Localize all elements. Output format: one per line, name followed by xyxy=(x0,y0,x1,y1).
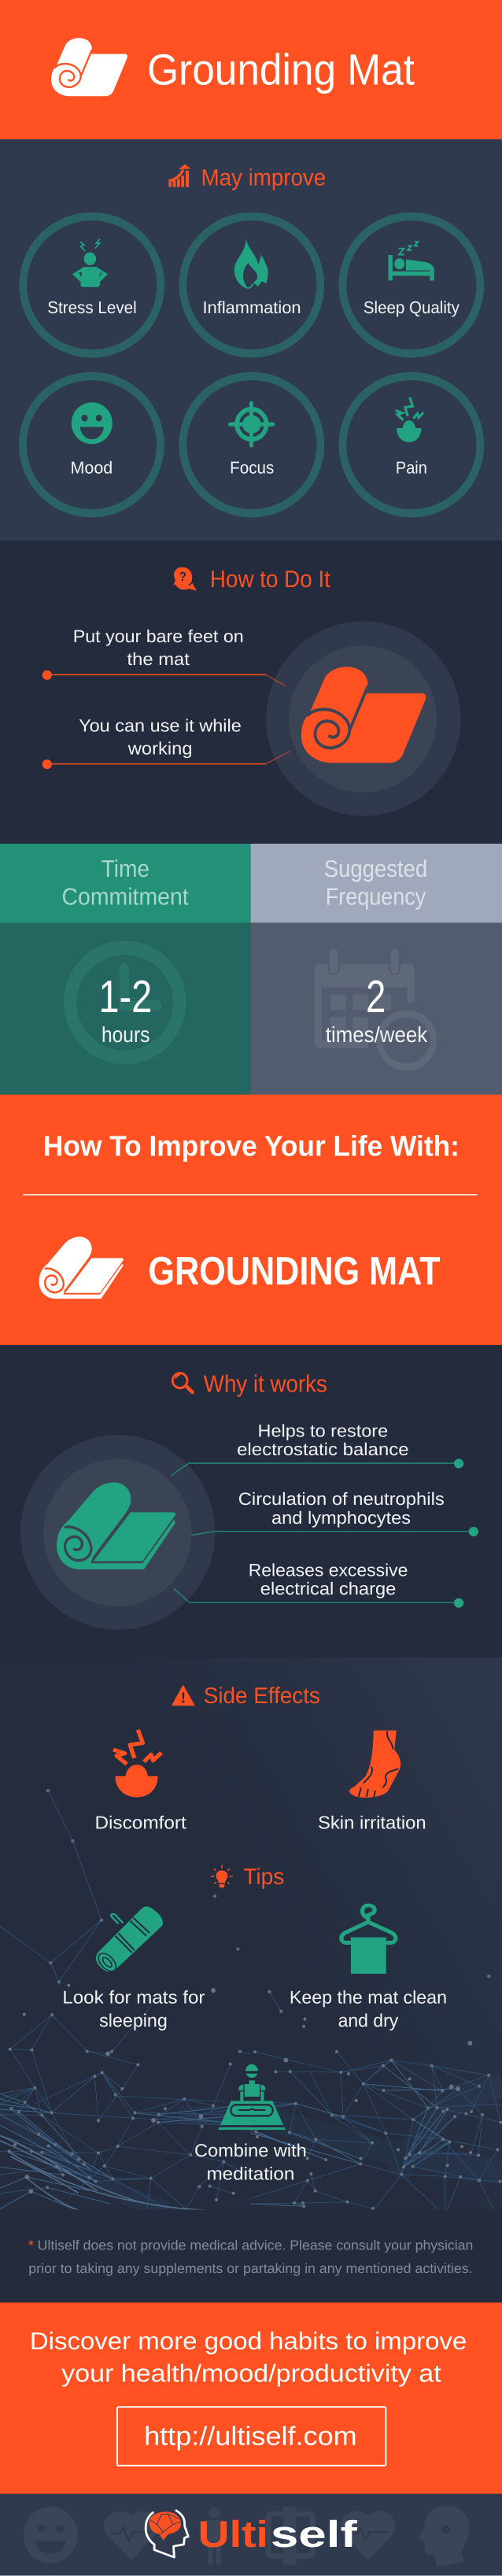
text: discover more: Discover more good habits to improve xyxy=(30,2327,467,2355)
value: 1-2 hours: hours xyxy=(102,1022,149,1047)
item: inflammation: Inflammation xyxy=(203,298,301,317)
icon: green open mat xyxy=(57,1483,175,1569)
item: clean and dry: Keep the mat clean xyxy=(290,1987,447,2007)
panel: tips xyxy=(62,1864,447,2031)
callout: bare feet: Put your bare feet on xyxy=(73,626,244,646)
callout: while working xyxy=(42,715,290,769)
title: Grounding Mat xyxy=(147,46,415,94)
item: discomfort: Discomfort xyxy=(94,1813,186,1832)
callout: while working: working xyxy=(127,738,193,758)
item: stress level xyxy=(23,216,161,353)
icon: magnifier xyxy=(172,1373,193,1392)
panel: how to improve your life banner xyxy=(0,1095,502,1345)
value: 1-2 hours xyxy=(98,970,152,1047)
item: sleep quality xyxy=(342,216,480,353)
icon: warning triangle xyxy=(172,1686,194,1705)
button: url: http://ultiself.com xyxy=(144,2421,357,2451)
item: focus xyxy=(183,376,320,513)
text: combine with meditation: meditation xyxy=(206,2164,294,2183)
button: url xyxy=(117,2407,386,2466)
text: discover more: your health/mood/productivity at xyxy=(61,2360,441,2387)
item: discomfort xyxy=(94,1730,186,1832)
panel: may improve xyxy=(0,139,502,541)
item: clean and dry: and dry xyxy=(338,2010,398,2031)
panel: suggested frequency xyxy=(251,844,502,1096)
panel: disclaimer: prior to taking any supplements or partaking in any mentioned activities. xyxy=(28,2260,473,2276)
callout: electrical charge xyxy=(174,1560,463,1608)
icon: meditation xyxy=(219,2064,285,2130)
value: 2 times/week xyxy=(326,970,428,1047)
item: sleep quality: Sleep Quality xyxy=(364,298,460,317)
callout: bare feet xyxy=(42,626,286,686)
text: discover more xyxy=(30,2327,467,2387)
heading: tips: Tips xyxy=(243,1864,284,1889)
heading: side effects: Side Effects xyxy=(204,1683,320,1708)
panel: time commitment xyxy=(0,844,251,1096)
item: stress level: Stress Level xyxy=(47,298,137,317)
item: clean and dry xyxy=(290,1905,447,2031)
item: pain xyxy=(342,376,480,513)
panel: disclaimer: * xyxy=(28,2238,34,2253)
item: skin irritation: Skin irritation xyxy=(318,1813,426,1832)
value: 2 times/week: 2 xyxy=(366,970,386,1022)
heading: suggested frequency xyxy=(324,856,427,910)
panel: footer xyxy=(0,2494,502,2576)
item: mats for sleeping xyxy=(62,1906,205,2031)
item: focus: Focus xyxy=(230,458,274,477)
heading: how to do it: How to Do It xyxy=(210,566,330,593)
heading: why it works: Why it works xyxy=(204,1370,327,1397)
logo: ultiself: self xyxy=(271,2514,357,2555)
icon: orange rolled mat xyxy=(301,667,426,763)
heading: how to improve: How To Improve Your Life With: xyxy=(43,1130,460,1162)
callout: neutrophils and lymphocytes: and lymphocytes xyxy=(271,1508,411,1528)
item: inflammation xyxy=(183,216,320,353)
logo mark: brain head xyxy=(146,2510,188,2557)
icon: white open mat xyxy=(39,1236,124,1299)
item: skin irritation xyxy=(318,1731,426,1832)
item: mats for sleeping: Look for mats for xyxy=(62,1987,205,2007)
callout: electrostatic balance: electrostatic balance xyxy=(237,1440,409,1459)
heading: grounding mat: GROUNDING MAT xyxy=(148,1249,440,1293)
callout: electrostatic balance: Helps to restore xyxy=(258,1421,388,1440)
callout: electrical charge: Releases excessive xyxy=(249,1560,408,1580)
callout: bare feet: the mat xyxy=(127,649,190,669)
item: combine with meditation xyxy=(194,2064,307,2183)
panel: header xyxy=(0,0,502,139)
panel: why it works xyxy=(20,1370,478,1630)
callout: electrical charge: electrical charge xyxy=(260,1579,396,1598)
mat medallion xyxy=(266,621,461,816)
callout: neutrophils and lymphocytes: Circulation of neutrophils xyxy=(238,1489,445,1509)
mat medallion xyxy=(20,1435,215,1630)
heading: time commitment: Time xyxy=(102,856,149,882)
heading: may improve: May improve xyxy=(201,164,326,190)
footer background icons xyxy=(24,2506,469,2567)
icon: rising chart xyxy=(168,164,191,187)
item: pain: Pain xyxy=(396,458,427,477)
icon: clock xyxy=(70,948,179,1057)
item: mats for sleeping: sleeping xyxy=(99,2010,168,2031)
panel: disclaimer: Ultiself does not provide medical advice. Please consult your physician xyxy=(38,2238,473,2253)
panel: side effects xyxy=(94,1683,426,1832)
callout: neutrophils and lymphocytes xyxy=(191,1489,478,1536)
panel: call to action xyxy=(0,2302,502,2494)
callout: while working: You can use it while xyxy=(79,715,242,735)
panel: disclaimer xyxy=(0,2209,502,2302)
heading: suggested frequency: Frequency xyxy=(326,883,426,910)
icon: white rolled mat xyxy=(51,38,127,96)
icon: question bubbles xyxy=(173,567,197,591)
heading: time commitment: Commitment xyxy=(62,883,189,910)
icon: question bubbles: ? xyxy=(179,569,186,584)
icon: light bulb xyxy=(211,1865,233,1887)
heading: suggested frequency: Suggested xyxy=(324,856,427,882)
text: combine with meditation: Combine with xyxy=(194,2140,307,2160)
text: combine with meditation xyxy=(194,2140,307,2183)
icon: calendar xyxy=(315,953,434,1067)
logo: ultiself: Ulti xyxy=(197,2514,268,2555)
value: 1-2 hours: 1-2 xyxy=(98,970,152,1022)
logo: ultiself xyxy=(146,2510,357,2557)
item: mood xyxy=(23,376,161,513)
value: 2 times/week: times/week xyxy=(326,1022,428,1047)
callout: electrostatic balance xyxy=(172,1421,463,1476)
item: mood: Mood xyxy=(71,458,113,477)
panel: how to do it xyxy=(0,541,502,844)
heading: time commitment xyxy=(62,856,189,910)
